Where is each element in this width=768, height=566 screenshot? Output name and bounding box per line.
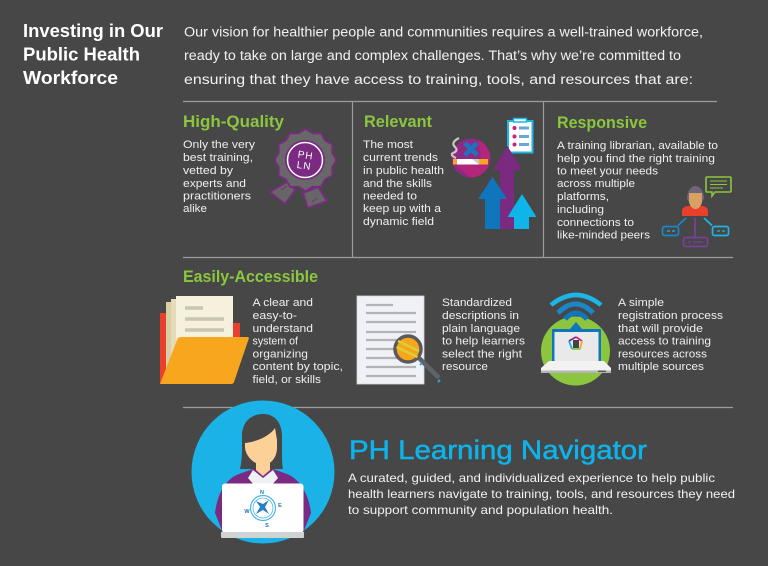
title: [23, 20, 163, 88]
intro text: ensuring that they have access to training, tools, and resources that are:: [184, 72, 693, 87]
text: responsive: including: [557, 204, 604, 216]
icon: PHLN badge: [270, 129, 336, 208]
text: navigator description: [348, 471, 735, 517]
panel: high-quality: [183, 112, 336, 215]
text: wifi laptop: access to training: [618, 336, 711, 348]
panel: responsive: [557, 113, 731, 246]
text: relevant: needed to: [363, 190, 417, 202]
heading: responsive: Responsive: [557, 113, 647, 132]
text: folder: [252, 297, 343, 386]
text: wifi laptop: multiple sources: [618, 361, 705, 373]
panel: easily-accessible: [160, 267, 724, 386]
text: responsive: to meet your needs: [557, 166, 659, 178]
panel: PH Learning Navigator: [192, 400, 735, 544]
icon: woman with laptop: [192, 400, 334, 544]
text: responsive: A training librarian, available to: [557, 140, 718, 152]
heading: PH Learning Navigator: PH Learning Navigator: [349, 435, 647, 465]
text: folder: content by topic,: [252, 361, 343, 373]
icon: PHLN badge: PH: [297, 149, 314, 163]
text: high-quality: vetted by: [183, 165, 234, 177]
icon: woman with laptop: W: [244, 509, 250, 515]
icon: woman with laptop: E: [278, 503, 282, 509]
text: navigator description: A curated, guided, and individualized experience to help public: [348, 471, 715, 485]
text: responsive: like-minded peers: [557, 230, 651, 242]
icon: PHLN badge: LN: [296, 160, 312, 173]
heading: relevant: Relevant: [364, 112, 432, 131]
text: document: to help learners: [442, 336, 526, 348]
text: relevant: keep up with a: [363, 203, 442, 215]
icon: no smoking: [452, 138, 490, 178]
text: wifi laptop: [618, 297, 724, 373]
text: navigator description: to support community and population health.: [348, 503, 613, 517]
text: relevant: dynamic field: [363, 216, 434, 228]
text: relevant: and the skills: [363, 178, 433, 190]
text: responsive: platforms,: [557, 191, 609, 203]
text: document: [442, 297, 526, 373]
icon: document and magnifier: [357, 296, 440, 384]
title: Workforce: [23, 67, 118, 88]
text: navigator description: health learners navigate to training, tools, and resources they need: [348, 487, 735, 501]
heading: high-quality: High-Quality: [183, 112, 285, 131]
text: relevant: [363, 139, 444, 228]
intro text: ready to take on large and complex challenges. That’s why we’re committed to: [184, 48, 681, 63]
icon: clipboard: [508, 118, 532, 152]
text: wifi laptop: registration process: [618, 310, 724, 322]
text: high-quality: practitioners: [183, 190, 252, 202]
icon: wifi laptop: [541, 295, 611, 386]
text: relevant: in public health: [363, 165, 444, 177]
text: wifi laptop: A simple: [618, 297, 664, 309]
text: document: Standardized: [442, 297, 512, 309]
text: high-quality: best training,: [183, 152, 253, 164]
icon: growth arrows: [478, 146, 536, 229]
text: folder: A clear and: [252, 297, 313, 309]
text: high-quality: alike: [183, 203, 207, 215]
text: folder: easy-to-: [252, 310, 297, 322]
text: relevant: current trends: [363, 152, 439, 164]
text: responsive: [557, 140, 718, 242]
intro text: [184, 24, 703, 87]
text: document: select the right: [442, 348, 522, 360]
icon: folder: [160, 296, 249, 384]
text: wifi laptop: that will provide: [618, 323, 703, 335]
text: document: plain language: [442, 323, 520, 335]
text: folder: field, or skills: [252, 374, 322, 386]
text: relevant: The most: [363, 139, 413, 151]
icon: woman with laptop: S: [265, 523, 269, 529]
text: responsive: across multiple: [557, 178, 635, 190]
title: Investing in Our: [23, 20, 163, 41]
text: high-quality: [183, 139, 256, 215]
intro text: Our vision for healthier people and communities requires a well-trained workforce,: [184, 24, 703, 40]
text: high-quality: Only the very: [183, 139, 256, 151]
text: document: descriptions in: [442, 310, 519, 322]
text: wifi laptop: resources across: [618, 348, 708, 360]
text: responsive: help you find the right training: [557, 153, 715, 165]
text: responsive: connections to: [557, 217, 634, 229]
title: Public Health: [23, 44, 140, 64]
heading: easily-accessible: Easily-Accessible: [183, 267, 318, 286]
icon: woman with laptop: N: [260, 490, 264, 496]
panel: relevant: [363, 112, 536, 229]
text: folder: understand: [252, 323, 313, 335]
text: folder: organizing: [252, 348, 308, 360]
text: high-quality: experts and: [183, 178, 246, 190]
text: document: resource: [442, 361, 488, 373]
icon: librarian network: [662, 177, 731, 246]
text: folder: system of: [252, 336, 299, 348]
